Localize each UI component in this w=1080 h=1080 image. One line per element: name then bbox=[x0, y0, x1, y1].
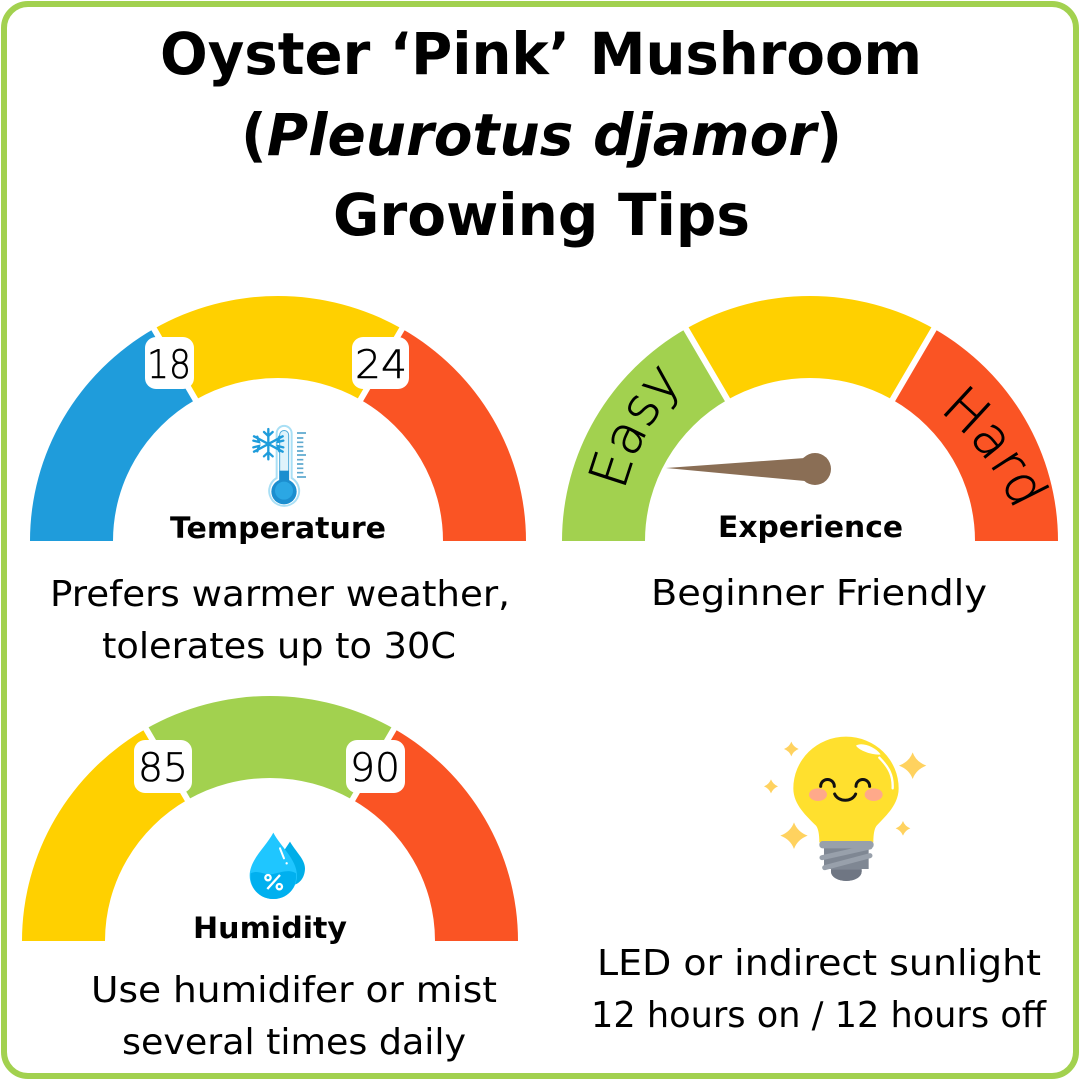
panel: experience bbox=[562, 296, 1058, 614]
label: easy: Easy bbox=[588, 365, 678, 486]
gauge: experience bbox=[562, 296, 1058, 541]
panel: temperature bbox=[30, 296, 526, 667]
icon: water drops bbox=[250, 833, 305, 899]
text: experience tip: Beginner Friendly bbox=[651, 573, 987, 614]
icon: thermometer bbox=[253, 425, 306, 507]
text: humidity tip bbox=[91, 970, 497, 1063]
text: temperature tip: tolerates up to 30C bbox=[102, 626, 456, 667]
text: light tip: 12 hours on / 12 hours off bbox=[591, 995, 1047, 1036]
label: easy bbox=[588, 365, 678, 486]
gauge: humidity bbox=[22, 696, 518, 941]
text: light tip bbox=[591, 943, 1047, 1036]
heading: experience: Experience bbox=[718, 510, 903, 544]
needle bbox=[666, 453, 831, 485]
label: 85: 85 bbox=[138, 746, 188, 791]
title: (Pleurotus djamor) bbox=[241, 101, 842, 169]
text: temperature tip bbox=[50, 574, 510, 667]
heading: temperature: Temperature bbox=[170, 511, 386, 545]
label: 18: 18 bbox=[147, 343, 191, 388]
label: hard: Hard bbox=[944, 386, 1050, 506]
title bbox=[160, 20, 922, 249]
text: humidity tip: several times daily bbox=[122, 1022, 466, 1063]
text: light tip: LED or indirect sunlight bbox=[597, 943, 1041, 984]
label: 24: 24 bbox=[355, 343, 407, 388]
title: Oyster ‘Pink’ Mushroom bbox=[160, 20, 922, 88]
panel: light bbox=[591, 737, 1047, 1036]
label: 90: 90 bbox=[350, 746, 400, 791]
heading: humidity: Humidity bbox=[193, 911, 347, 945]
panel: humidity bbox=[22, 696, 518, 1063]
gauge: temperature bbox=[30, 296, 526, 541]
title: Growing Tips bbox=[333, 181, 750, 249]
text: humidity tip: Use humidifer or mist bbox=[91, 970, 497, 1011]
text: temperature tip: Prefers warmer weather, bbox=[50, 574, 510, 615]
icon: smiling light bulb bbox=[764, 737, 926, 881]
